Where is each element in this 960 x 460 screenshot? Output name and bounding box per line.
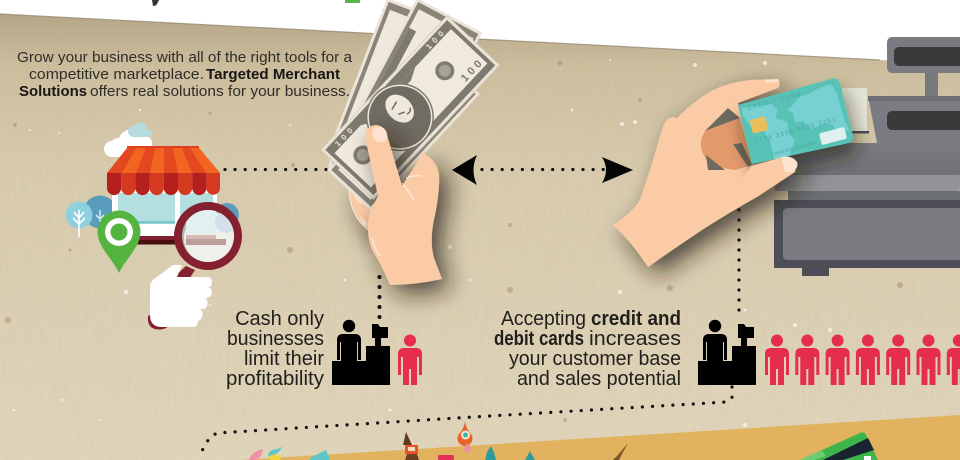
- text: cash only businesses: businesses: [227, 328, 324, 350]
- credit card details: 1234 3365 3689 2351: [754, 117, 837, 145]
- dotted connector: between cash and card: [482, 168, 606, 171]
- icon: green card: [800, 432, 878, 460]
- register drawer: [774, 200, 960, 276]
- icon: clouds: [104, 123, 153, 157]
- text: cash only businesses: profitability: [226, 368, 324, 390]
- text: accepting credit and debit cards: increases: [589, 328, 681, 350]
- text: cash only businesses: Cash only: [235, 308, 324, 330]
- intro text block: Grow your business with all of the right tools for a: [17, 50, 353, 66]
- icon: teal spire: [485, 446, 496, 460]
- icon: brown spire: [613, 443, 628, 460]
- icon: white hand: [148, 265, 212, 330]
- icon: red customer: [398, 334, 422, 385]
- icon: credit card: [738, 79, 853, 164]
- icon: teal book: [310, 450, 330, 460]
- illustration: hand holding credit card: [613, 79, 853, 267]
- back fingers: [349, 183, 378, 230]
- icon: yellow shape: [269, 454, 281, 460]
- arrow: right: [602, 157, 633, 183]
- clipped header text remnants: [152, 0, 360, 6]
- icon: pink leaf: [249, 449, 263, 460]
- icon: front banknote: [321, 16, 499, 199]
- icon: cashier: [332, 320, 390, 385]
- icon: pink sign: [438, 455, 454, 460]
- icon: clock tower: [403, 432, 419, 460]
- intro text block: offers real solutions for your business.: [90, 84, 350, 100]
- icon: back banknote 1: [333, 0, 449, 162]
- hand back: [613, 79, 797, 267]
- text: accepting credit and debit cards: [494, 308, 681, 390]
- receipt paper: [842, 88, 869, 134]
- register display: [887, 37, 960, 98]
- icon: back banknote 2: [328, 0, 482, 201]
- text: accepting credit and debit cards: and sales potential: [517, 368, 681, 390]
- text: cash only businesses: [226, 308, 324, 390]
- illustration: storefront with pin and magnifier: [66, 123, 242, 329]
- credit card details: [742, 84, 849, 162]
- register upper body: [868, 96, 960, 143]
- icon: front banknote: 100: [459, 58, 485, 85]
- icon: red customers row: [765, 334, 960, 385]
- icon: front banknote: 100: [333, 126, 355, 148]
- illustration: cash register: [774, 37, 960, 276]
- dotted connector: cash hand to cash business: [378, 277, 382, 318]
- dotted connector: card hand to card business: [737, 210, 741, 320]
- orange lower band: [241, 415, 960, 460]
- dotted connector: storefront to cash: [225, 168, 328, 171]
- intro text block: Solutions: [19, 84, 87, 100]
- register keypad shelf: [775, 143, 960, 200]
- text: accepting credit and debit cards: Accepting: [501, 308, 586, 330]
- credit card details: CARD HOLDER NAME: [771, 140, 818, 157]
- icon: cashier and many customers: [698, 320, 960, 385]
- hand palm and thumb: [365, 125, 442, 285]
- text: accepting credit and debit cards: debit cards: [494, 328, 584, 350]
- icon: orange map drop: [458, 421, 473, 453]
- intro text block: [17, 50, 353, 100]
- icon: magnifying glass: [174, 202, 242, 277]
- icon: trees: [66, 196, 239, 237]
- text: accepting credit and debit cards: your customer base: [509, 348, 681, 370]
- thumb and finger: [735, 79, 797, 197]
- icon: cashier and one customer: [332, 320, 422, 385]
- shop body: [112, 190, 217, 244]
- icon: location pin: [98, 211, 140, 273]
- icon: teal bird: [268, 444, 283, 460]
- text: cash only businesses: limit their: [244, 348, 324, 370]
- intro text block: competitive marketplace.: [29, 67, 204, 83]
- arrow: left: [452, 155, 477, 185]
- dotted connector: long route to lower band: [199, 387, 732, 457]
- credit card details: CREDIT CARD: [747, 92, 802, 112]
- lower band travel icons: [249, 421, 878, 460]
- intro text block: Targeted Merchant: [206, 67, 340, 83]
- icon: front banknote: 100: [424, 29, 446, 51]
- text: accepting credit and debit cards: credit and: [591, 308, 681, 330]
- icon: awning: [107, 146, 220, 195]
- icon: cashier: [698, 320, 756, 385]
- icon: teal spire small: [525, 451, 535, 460]
- icon: back banknote 3: [327, 53, 480, 211]
- inner palm shadow: [701, 108, 752, 170]
- illustration: hand holding cash: [321, 0, 499, 285]
